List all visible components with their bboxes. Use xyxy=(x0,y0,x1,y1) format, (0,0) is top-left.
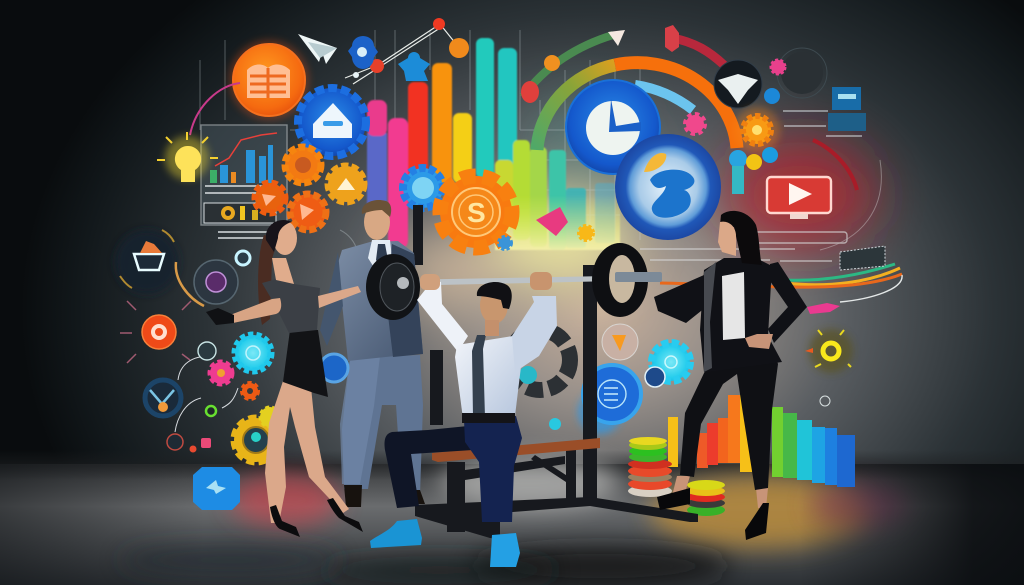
icon: swirl ring xyxy=(194,260,238,304)
icon: small blue puzzle xyxy=(348,36,378,69)
gear: cyan right xyxy=(652,343,690,381)
icon: red capsule xyxy=(521,81,539,103)
gear: blue near man xyxy=(320,354,348,382)
person: woman in black suit xyxy=(654,211,807,540)
icon: orange swirl badge xyxy=(120,301,191,363)
icon: blue puzzle star xyxy=(398,52,430,81)
icon: pink tag xyxy=(190,438,211,452)
gear: yellow large xyxy=(234,407,280,462)
icon: blue menu badge xyxy=(578,365,641,434)
icon: small ring xyxy=(198,342,216,360)
icon: orange sun gear xyxy=(734,107,780,153)
line art: pink curve to book xyxy=(190,83,240,135)
gear: large orange: S xyxy=(467,197,486,228)
stacked weight discs: tall xyxy=(628,437,672,497)
floor xyxy=(0,450,1024,585)
line art: orange swoosh xyxy=(176,262,204,306)
icon: lime ring xyxy=(206,406,216,416)
icon: video play xyxy=(767,177,831,219)
icon: small ring lower xyxy=(167,434,183,450)
icon: shopping basket xyxy=(115,230,179,294)
line graph with arrow: top xyxy=(345,18,469,84)
person: woman with ponytail left xyxy=(206,220,363,537)
person: man in grey suit xyxy=(320,200,425,507)
icon: pink flower gear xyxy=(686,115,704,133)
gear: pink xyxy=(210,362,232,384)
line art: connectors xyxy=(175,356,238,432)
gear: orange small xyxy=(242,383,258,399)
gear: blue xyxy=(403,168,443,208)
wall colour glow xyxy=(390,90,875,310)
icon: orange dot xyxy=(544,55,560,71)
barbell xyxy=(366,243,662,320)
icon: small white swirl xyxy=(236,251,250,265)
icon: small ring right xyxy=(820,396,830,406)
bench press rack xyxy=(413,205,698,539)
icon: red tag xyxy=(665,25,679,52)
icon: blue small badge xyxy=(645,367,665,387)
line art: grid behind graphics xyxy=(200,30,660,280)
icon: orange ring xyxy=(602,324,638,360)
gear: dark back gear xyxy=(510,330,570,390)
icon: pink gear xyxy=(771,60,785,74)
icon: dial xyxy=(777,48,827,98)
icon: cyan drop xyxy=(549,418,561,430)
icon: small panels xyxy=(783,87,866,136)
stacked weight discs: short xyxy=(687,480,725,516)
icon: shield badge xyxy=(145,380,181,416)
panel: dashboard chart xyxy=(201,125,287,238)
icon: light bulb xyxy=(157,132,218,182)
gear: cyan glow xyxy=(235,335,271,371)
icon: blue gear small xyxy=(764,88,780,104)
bar chart: floor right xyxy=(668,395,855,487)
arrow: pink xyxy=(536,207,568,236)
icon: paper plane xyxy=(298,34,337,64)
icon: blue puzzle block xyxy=(193,467,240,510)
gear: large orange xyxy=(440,176,512,248)
icon: pink brush mark xyxy=(807,303,840,314)
icon: winged logo xyxy=(714,60,762,108)
icon: book badge xyxy=(229,40,309,120)
icon: small paper plane xyxy=(608,30,625,46)
icon: mini table xyxy=(840,246,885,270)
person: seated man xyxy=(370,272,557,567)
flowing lines: right xyxy=(660,264,902,302)
icons: small flowers xyxy=(729,147,778,170)
icon: puzzle head badge xyxy=(615,134,721,240)
icon: yellow bulb xyxy=(805,329,853,373)
line art: frames right xyxy=(640,160,881,261)
arcs: rainbow gauge xyxy=(523,35,857,190)
gears: orange cluster xyxy=(255,147,364,230)
bar chart: main xyxy=(367,38,620,250)
gear: small teal xyxy=(499,237,511,249)
icon: yellow flower xyxy=(579,226,593,240)
icon: pie chart badge xyxy=(566,80,660,174)
icon: blue gear with cloud xyxy=(298,88,366,156)
